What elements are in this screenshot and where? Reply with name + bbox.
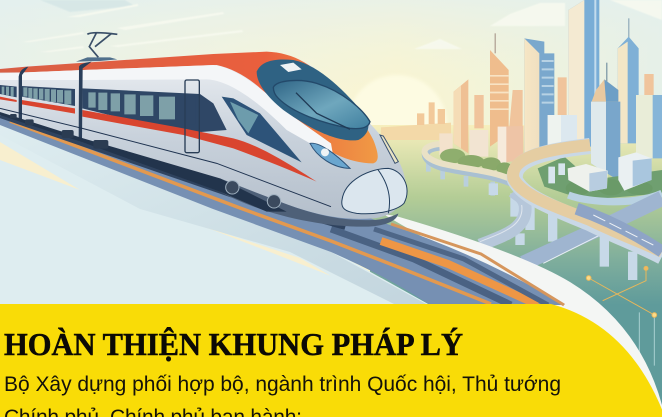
ground bbox=[370, 125, 662, 417]
trees and low buildings bbox=[440, 149, 662, 200]
bogies bbox=[10, 114, 108, 149]
wiper bbox=[296, 93, 350, 129]
nose slit bbox=[380, 135, 398, 163]
windshield surround bbox=[257, 59, 368, 140]
front wheels bbox=[226, 181, 281, 208]
railway track bbox=[0, 100, 565, 305]
train body bbox=[0, 52, 406, 219]
main elevated interchange roads bbox=[480, 145, 662, 280]
white track embankment bbox=[383, 214, 662, 417]
windshield glass bbox=[273, 80, 370, 129]
sky background bbox=[0, 0, 662, 305]
high-speed train bbox=[0, 52, 407, 227]
white body upper highlight bbox=[0, 65, 333, 157]
nose seam bbox=[378, 169, 390, 213]
side triangular window bbox=[222, 97, 302, 162]
headlight bbox=[310, 143, 350, 168]
title: HOÀN THIỆN KHUNG PHÁP LÝ bbox=[4, 326, 463, 362]
left elevated road bbox=[425, 144, 513, 196]
train roof red stripe bbox=[0, 52, 378, 163]
clouds and speed streaks bbox=[22, 0, 662, 52]
rear car window band bbox=[0, 85, 17, 97]
front car window band bbox=[82, 88, 227, 133]
middle car window band bbox=[22, 86, 75, 106]
side window glass bbox=[230, 102, 258, 133]
sun bbox=[347, 75, 447, 175]
lower body line and skirt bbox=[0, 108, 331, 207]
pale lower-left ground bbox=[0, 118, 430, 305]
passenger windows bbox=[2, 87, 175, 119]
yellow text panel bbox=[0, 304, 662, 417]
body text line 1: Bộ Xây dựng phối hợp bộ, ngành trình Quốc hội, Thủ tướng bbox=[4, 373, 561, 396]
track shading band bbox=[0, 125, 428, 305]
door bbox=[185, 80, 199, 153]
red side stripes bbox=[0, 97, 317, 182]
cream light streaks bbox=[0, 142, 331, 276]
city skyline bbox=[381, 0, 662, 182]
car gaps bbox=[19, 62, 92, 140]
door window bbox=[187, 97, 196, 125]
headlight lens bbox=[321, 148, 329, 156]
roof hatch bbox=[280, 63, 302, 72]
pantograph bbox=[76, 32, 117, 62]
glowing network nodes bbox=[586, 266, 657, 366]
nose cone bbox=[342, 168, 407, 214]
